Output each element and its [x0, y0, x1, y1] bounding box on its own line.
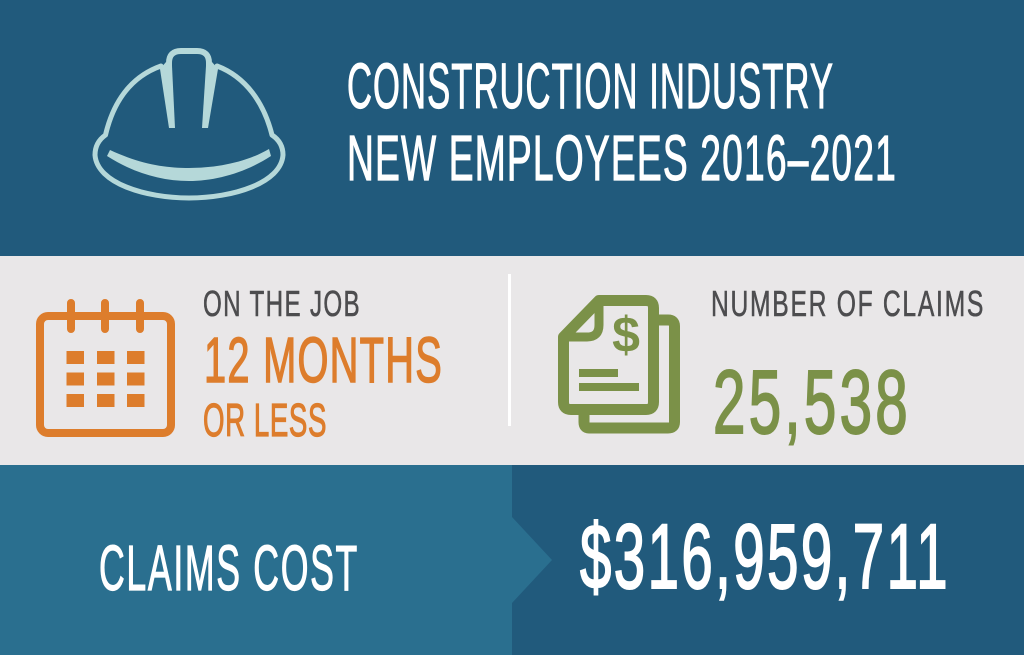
panel: claims cost — [0, 465, 1024, 655]
panel: number of claims — [564, 283, 985, 453]
value: claim count: 25,538 — [713, 353, 911, 453]
panel: stats band — [0, 256, 1024, 465]
panel: time on the job — [40, 283, 443, 446]
icon: hard hat — [95, 51, 283, 198]
value: or less: OR LESS — [203, 394, 327, 446]
value: 12 months: 12 MONTHS — [204, 324, 443, 396]
label: on the job: ON THE JOB — [203, 283, 361, 324]
icon: claim documents — [564, 300, 674, 428]
icon: calendar — [40, 303, 171, 433]
panel: header — [0, 0, 1024, 256]
title — [347, 50, 897, 194]
arrow — [512, 517, 552, 603]
icon: dollar sign: $ — [612, 307, 640, 363]
label: claims cost: CLAIMS COST — [99, 532, 359, 604]
